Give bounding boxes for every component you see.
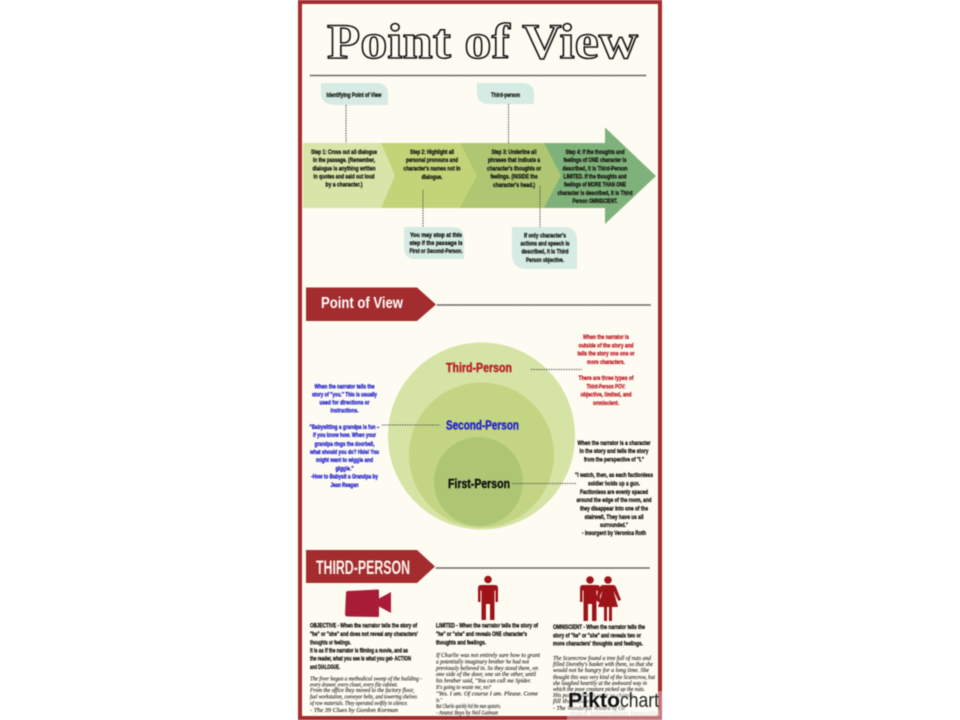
text block: first-person definition: - Insurgent by Veronica Roth — [582, 530, 646, 537]
text block: third-person definition: objective, limited, and — [580, 392, 632, 399]
piktochart logo: make information beautiful — [569, 709, 660, 718]
text block: omniscient: OMNISCIENT - When the narrator tells the — [553, 624, 645, 631]
quote: wizard of oz: fill the basket. — [553, 698, 593, 705]
step 2 text: personal pronouns and — [406, 157, 458, 164]
text block: limited: "he" or "she" and reveals ONE character's — [436, 631, 527, 638]
step 4 text: described, it is Third-Person — [562, 165, 628, 172]
callout: third person objective: If only character's — [524, 233, 566, 240]
text block: objective: OBJECTIVE - When the narrator tells the story of — [310, 622, 418, 630]
quote: the 39 clues: every drawer, every closet, every file cabinet. — [310, 682, 398, 688]
quote: anansi boys: one side of the door, one on the other, until — [436, 671, 536, 678]
label: third-person: Third-Person — [446, 361, 512, 375]
piktochart logo — [567, 690, 662, 720]
step 3 text: feelings. (INSIDE the — [490, 173, 538, 180]
step 1 text: in the passage. (Remember, — [313, 157, 375, 164]
arrow segment: step 4 — [530, 128, 656, 224]
text block: objective: It is as if the narrator is filming a movie, and as — [310, 648, 408, 654]
quote: anansi boys: It's going to waste me, no? — [435, 684, 492, 691]
label: second-person: Second-Person — [446, 418, 519, 432]
nested circle diagram — [388, 342, 575, 530]
text block: second-person definition: story of "you." This is usually — [312, 392, 377, 399]
section banner: third-person — [306, 550, 435, 583]
quote: the 39 clues: of raw materials. They operated swiftly in silence. — [310, 700, 408, 707]
callout: stop at step 2: step if the passage is — [410, 240, 463, 247]
text block: first-person definition: "I watch, then, as each factionless — [575, 472, 653, 479]
step 4 text — [558, 149, 632, 205]
title: Point of View — [327, 13, 638, 69]
step 1 text: dialogue is anything written — [312, 165, 376, 172]
section banner: third-person: THIRD-PERSON — [316, 558, 410, 579]
quote: wizard of oz: would not be hungry for a long time. She — [553, 667, 649, 674]
quote: wizard of oz: filled Dorothy's basket with them, so that she — [553, 661, 653, 668]
quote: anansi boys: in." — [436, 697, 442, 704]
step 2 text: character's names not in — [404, 165, 460, 172]
arrow segment: step 2 — [370, 143, 477, 208]
text block: limited: LIMITED - When the narrator tells the story of — [436, 622, 539, 630]
icon: man and woman — [580, 576, 621, 621]
quote: anansi boys: - Anansi Boys by Neil Gaiman — [436, 709, 498, 716]
text block: objective: the reader, what you see is what you get- ACTION — [310, 656, 411, 662]
icon: video camera — [345, 590, 391, 617]
quote: the 39 clues: From the office they moved to the factory floor, — [309, 687, 414, 694]
piktochart logo: chart — [620, 690, 659, 712]
text block: omniscient: story of "he" or "she" and reveals two or — [553, 632, 641, 640]
step 4 text: Person OMNISCIENT. — [572, 198, 618, 205]
callout: stop at step 2: You may stop at this — [410, 232, 462, 239]
callout: third person objective: Person objective. — [526, 257, 564, 264]
text block: limited — [436, 622, 539, 646]
text block: first-person definition: soldier holds up a gun. — [588, 480, 640, 488]
quote: anansi boys: a potentially imaginary brother he had not — [436, 658, 529, 665]
quote: wizard of oz: which the poor creature picked up the nuts. — [553, 686, 645, 693]
text block: second-person definition: "Babysitting a grandpa is fun – — [310, 424, 380, 431]
step 4 text: feelings of MORE THAN ONE — [564, 181, 626, 188]
text block: third-person definition: Third-Person POV: — [586, 384, 626, 391]
quote: wizard of oz: The Scarecrow found a tree full of nuts and — [553, 655, 652, 662]
quote: wizard of oz: she laughed heartily at the awkward way in — [553, 680, 647, 687]
step 1 text: in quotes and said out loud — [314, 173, 374, 180]
quote: anansi boys: his brother said, "You can call me Spider. — [436, 678, 531, 685]
text block: second-person definition: instructions. — [330, 408, 359, 415]
text block: first-person definition: Factionless are evenly spaced — [580, 489, 648, 496]
quote: anansi boys: If Charlie was not entirely sure how to grant — [435, 652, 540, 659]
text block: first-person definition: from the perspective of "I." — [584, 456, 644, 464]
step 3 text: character's head.) — [493, 182, 535, 189]
quote: wizard of oz: His padded hands were so clumsy — [552, 692, 633, 699]
callout: stop at step 2 — [404, 190, 464, 259]
text block: third-person definition: omniscient. — [593, 400, 619, 407]
quote: anansi boys: "Yes. I am. Of course I am. Please. Come — [436, 690, 538, 697]
section banner: point of view — [306, 288, 436, 321]
callout: third-person: Third-person — [491, 92, 520, 99]
step 4 text: LIMITED. If the thoughts and — [564, 173, 626, 180]
step 4 text: Step 4: If the thoughts and — [566, 149, 624, 156]
step 3 text: character's thoughts or — [487, 165, 541, 172]
text block: first-person definition: in the story and tells the story — [580, 448, 649, 455]
text block: first-person definition: they disappear into one of the — [580, 506, 648, 512]
quote: anansi boys — [435, 652, 540, 716]
text block: first-person definition: stairwell, They have us all — [584, 514, 644, 521]
circle: third-person — [388, 342, 575, 530]
text block: objective: and DIALOGUE. — [310, 664, 340, 671]
text block: limited: thoughts and feelings. — [436, 640, 486, 646]
section banner: point of view: Point of View — [321, 295, 403, 312]
text block: second-person definition: might want to wiggle and — [316, 457, 373, 464]
quote: the 39 clues — [309, 676, 422, 714]
piktochart logo: Pikto — [568, 690, 620, 712]
callout: third person objective — [512, 186, 577, 269]
text block: third-person definition: There are three types of — [578, 375, 634, 382]
step 1 text — [311, 149, 377, 189]
text block: third-person definition: When the narrator is — [583, 334, 629, 341]
callout: third-person — [477, 83, 534, 143]
step 4 text: feelings of ONE character is — [564, 157, 627, 164]
text block: second-person definition: what should you do? Hide! You — [309, 449, 379, 456]
step 3 text: Step 3: Underline all — [492, 149, 537, 156]
step 3 text — [487, 149, 541, 189]
label: first-person: First-Person — [448, 476, 510, 491]
text block: second-person definition: Jean Reagan — [330, 482, 358, 489]
text block: first-person definition — [575, 440, 653, 537]
circle: first-person — [434, 437, 523, 526]
step 2 text: Step 2: Highlight all — [410, 149, 454, 156]
text block: third-person definition — [578, 334, 635, 407]
arrow segment: step 3 — [445, 143, 561, 208]
step 4 text: character is described, it is Third — [558, 190, 632, 197]
icon: single person — [478, 576, 498, 620]
text block: second-person definition: used for directions or — [320, 400, 370, 407]
quote: anansi boys: previously believed in. So they stood there, on — [435, 665, 538, 672]
process arrow with four steps — [303, 128, 656, 224]
quote: the 39 clues: - The 39 Clues by Gordon Korman — [310, 707, 398, 714]
circle: second-person — [409, 382, 554, 528]
text block: second-person definition: When the narrator tells the — [314, 384, 375, 391]
quote: the 39 clues: The fiver begun a methodical sweep of the building - — [310, 676, 422, 682]
text block: second-person definition: -How to Babysit a Grandpa by — [311, 474, 378, 480]
text block: omniscient: more characters' thoughts and feelings. — [553, 640, 643, 648]
quote: wizard of oz — [552, 655, 655, 712]
text block: second-person definition — [309, 384, 380, 489]
text block: first-person definition: around the edge of the room, and — [576, 497, 652, 504]
text block: second-person definition: if you know how. When your — [313, 432, 376, 439]
text block: objective — [310, 622, 418, 671]
text block: third-person definition: outside of the story and — [578, 343, 634, 350]
step 2 text — [404, 149, 460, 181]
poster background and red border — [300, 2, 660, 718]
quote: wizard of oz: thought this was very kind of the Scarecrow, but — [553, 674, 655, 681]
text block: omniscient — [553, 624, 645, 648]
step 1 text: Step 1: Cross out all dialogue — [311, 149, 377, 156]
quote: the 39 clues: fuel workstation, conveyor belts, and towering shelves — [310, 694, 417, 700]
quote: anansi boys: But Charlie quickly hid the man upstairs. — [436, 703, 501, 710]
text block: objective: thoughts or feelings. — [310, 640, 351, 646]
arrow segment: step 1 — [303, 143, 395, 208]
step 1 text: by a character.) — [326, 182, 362, 189]
text block: third-person definition: tells the story one one or — [578, 351, 635, 358]
callout: stop at step 2: First or Second-Person. — [410, 248, 463, 255]
text block: objective: "he" or "she" and does not reveal any characters' — [310, 631, 418, 638]
step 3 text: phrases that indicate a — [488, 157, 540, 164]
callout: identifying point of view: Identifying Point of View — [326, 92, 382, 99]
text block: third-person definition: more characters. — [587, 359, 625, 366]
quote: wizard of oz: - The Wonderful Wizard of Oz — [553, 705, 625, 712]
callout: identifying point of view — [321, 83, 388, 143]
text block: second-person definition: giggle." — [336, 466, 354, 472]
callout: third person objective: actions and speech is — [520, 241, 570, 248]
text block: first-person definition: surrounded." — [600, 522, 628, 529]
text block: second-person definition: grandpa rings the doorbell, — [314, 441, 375, 448]
callout: third person objective: described, it is Third — [522, 249, 568, 256]
text block: first-person definition: When the narrator is a character — [578, 440, 651, 447]
step 2 text: dialogue. — [422, 174, 443, 181]
